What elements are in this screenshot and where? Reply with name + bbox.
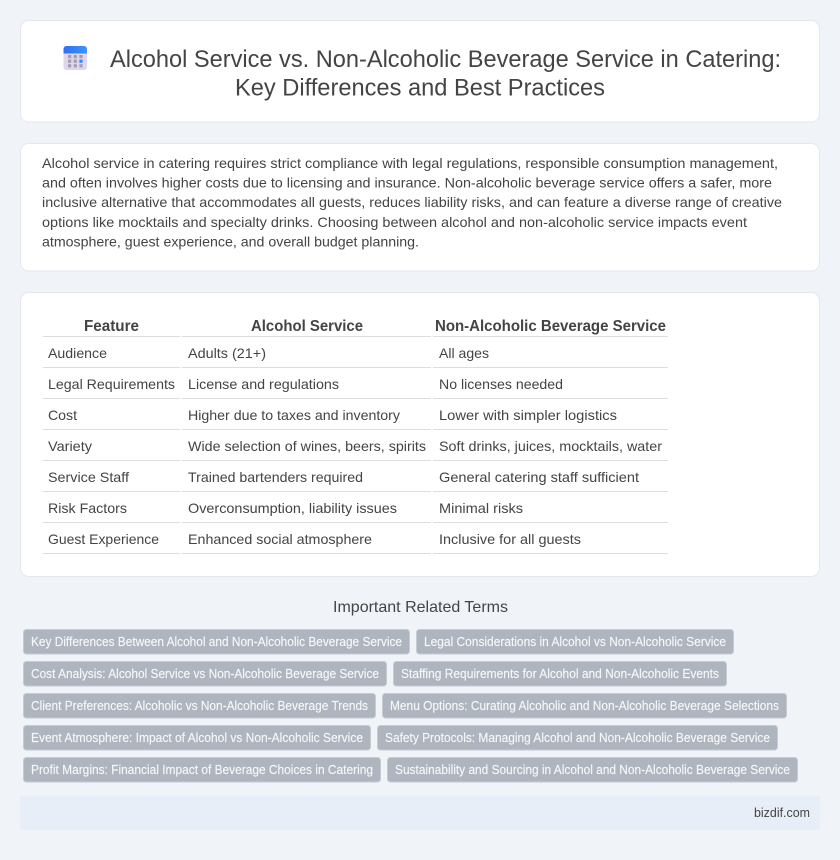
table row: service staff: General catering staff sufficient (439, 469, 639, 485)
tag: menu options: Menu Options: Curating Alcoholic and Non-Alcoholic Beverage Selections (390, 698, 779, 713)
tag: event atmosphere (24, 726, 370, 750)
tag: sustainability and sourcing (388, 758, 798, 782)
tag: client preferences: Client Preferences: Alcoholic vs Non-Alcoholic Beverage Trends (31, 698, 368, 713)
text block: introduction paragraph: Alcohol service in catering requires strict compliance with legal regulations, responsible consumption management, (42, 155, 778, 171)
tag: client preferences (24, 694, 376, 718)
tag: safety protocols: Safety Protocols: Managing Alcohol and Non-Alcoholic Beverage Service (385, 730, 770, 745)
table row: guest experience: Guest Experience (48, 531, 159, 547)
table row: guest experience: Inclusive for all guests (439, 531, 581, 547)
panel: comparison table (20, 292, 820, 576)
icon: calendar (64, 46, 87, 70)
tag: key differences: Key Differences Between Alcohol and Non-Alcoholic Beverage Service (31, 634, 402, 649)
title (110, 46, 781, 102)
footer: bizdif.com (754, 805, 810, 820)
tag: legal considerations (416, 630, 734, 654)
table row: variety: Wide selection of wines, beers, spirits (188, 438, 426, 454)
panel: related term tags (24, 630, 798, 782)
title: Key Differences and Best Practices (235, 74, 605, 102)
tag: key differences (24, 630, 410, 654)
table row: risk factors (43, 500, 668, 523)
tag: staffing requirements (394, 662, 726, 686)
table row: legal requirements: License and regulations (188, 376, 339, 392)
table row: risk factors: Overconsumption, liability issues (188, 500, 397, 516)
table row: risk factors: Minimal risks (439, 500, 523, 516)
table row: audience: All ages (439, 345, 489, 361)
table row: cost: Cost (48, 407, 77, 423)
tag: event atmosphere: Event Atmosphere: Impact of Alcohol vs Non-Alcoholic Service (31, 730, 363, 745)
table row: service staff (43, 469, 668, 492)
tag: cost analysis: Cost Analysis: Alcohol Service vs Non-Alcoholic Beverage Service (31, 666, 379, 681)
heading: important related terms: Important Related Terms (333, 599, 508, 616)
table row: risk factors: Risk Factors (48, 500, 127, 516)
text block: introduction paragraph: inclusive alternative that accommodates all guests, reduces liability risks, and can feature a diverse range of creative (42, 194, 782, 210)
table row: cost: Lower with simpler logistics (439, 407, 617, 423)
table row: cost: Higher due to taxes and inventory (188, 407, 400, 423)
table row: legal requirements: Legal Requirements (48, 376, 175, 392)
table header row: Alcohol Service (251, 318, 363, 335)
table row: legal requirements (43, 376, 668, 399)
title: Alcohol Service vs. Non-Alcoholic Beverage Service in Catering: (110, 46, 781, 73)
table row: service staff: Trained bartenders required (188, 469, 363, 485)
tag: menu options (382, 694, 786, 718)
table row: audience (43, 345, 668, 368)
table row: variety: Soft drinks, juices, mocktails, water (439, 438, 662, 454)
tag: sustainability and sourcing: Sustainability and Sourcing in Alcohol and Non-Alcoholic Beverage Service (395, 762, 790, 777)
table header row: Non-Alcoholic Beverage Service (435, 318, 666, 335)
table row: variety: Variety (48, 438, 92, 454)
tag: profit margins: Profit Margins: Financial Impact of Beverage Choices in Catering (31, 762, 373, 777)
table row: audience: Audience (48, 345, 107, 361)
table row: variety (43, 438, 668, 461)
footer (20, 796, 820, 830)
table header row: Feature (84, 318, 139, 335)
text block: introduction paragraph (42, 155, 782, 249)
table row: guest experience: Enhanced social atmosphere (188, 531, 372, 547)
panel: header (20, 20, 820, 122)
panel: introduction (20, 144, 820, 271)
tag: profit margins (24, 758, 380, 782)
text block: introduction paragraph: atmosphere, guest experience, and overall budget planning. (42, 233, 419, 249)
table row: legal requirements: No licenses needed (439, 376, 563, 392)
text block: introduction paragraph: options like mocktails and specialty drinks. Choosing between alcohol and non-alcoholic service impacts event (42, 214, 747, 230)
table row: cost (43, 407, 668, 430)
table row: service staff: Service Staff (48, 469, 129, 485)
table row: guest experience (43, 531, 668, 554)
tag: legal considerations: Legal Considerations in Alcohol vs Non-Alcoholic Service (424, 634, 726, 649)
tag: staffing requirements: Staffing Requirements for Alcohol and Non-Alcoholic Events (401, 666, 719, 681)
table row: audience: Adults (21+) (188, 345, 266, 361)
text block: introduction paragraph: and often involves higher costs due to licensing and insurance. Non-alcoholic beverage service offers a safer, more (42, 175, 772, 191)
tag: safety protocols (378, 726, 778, 750)
table header row (43, 318, 668, 337)
tag: cost analysis (24, 662, 386, 686)
